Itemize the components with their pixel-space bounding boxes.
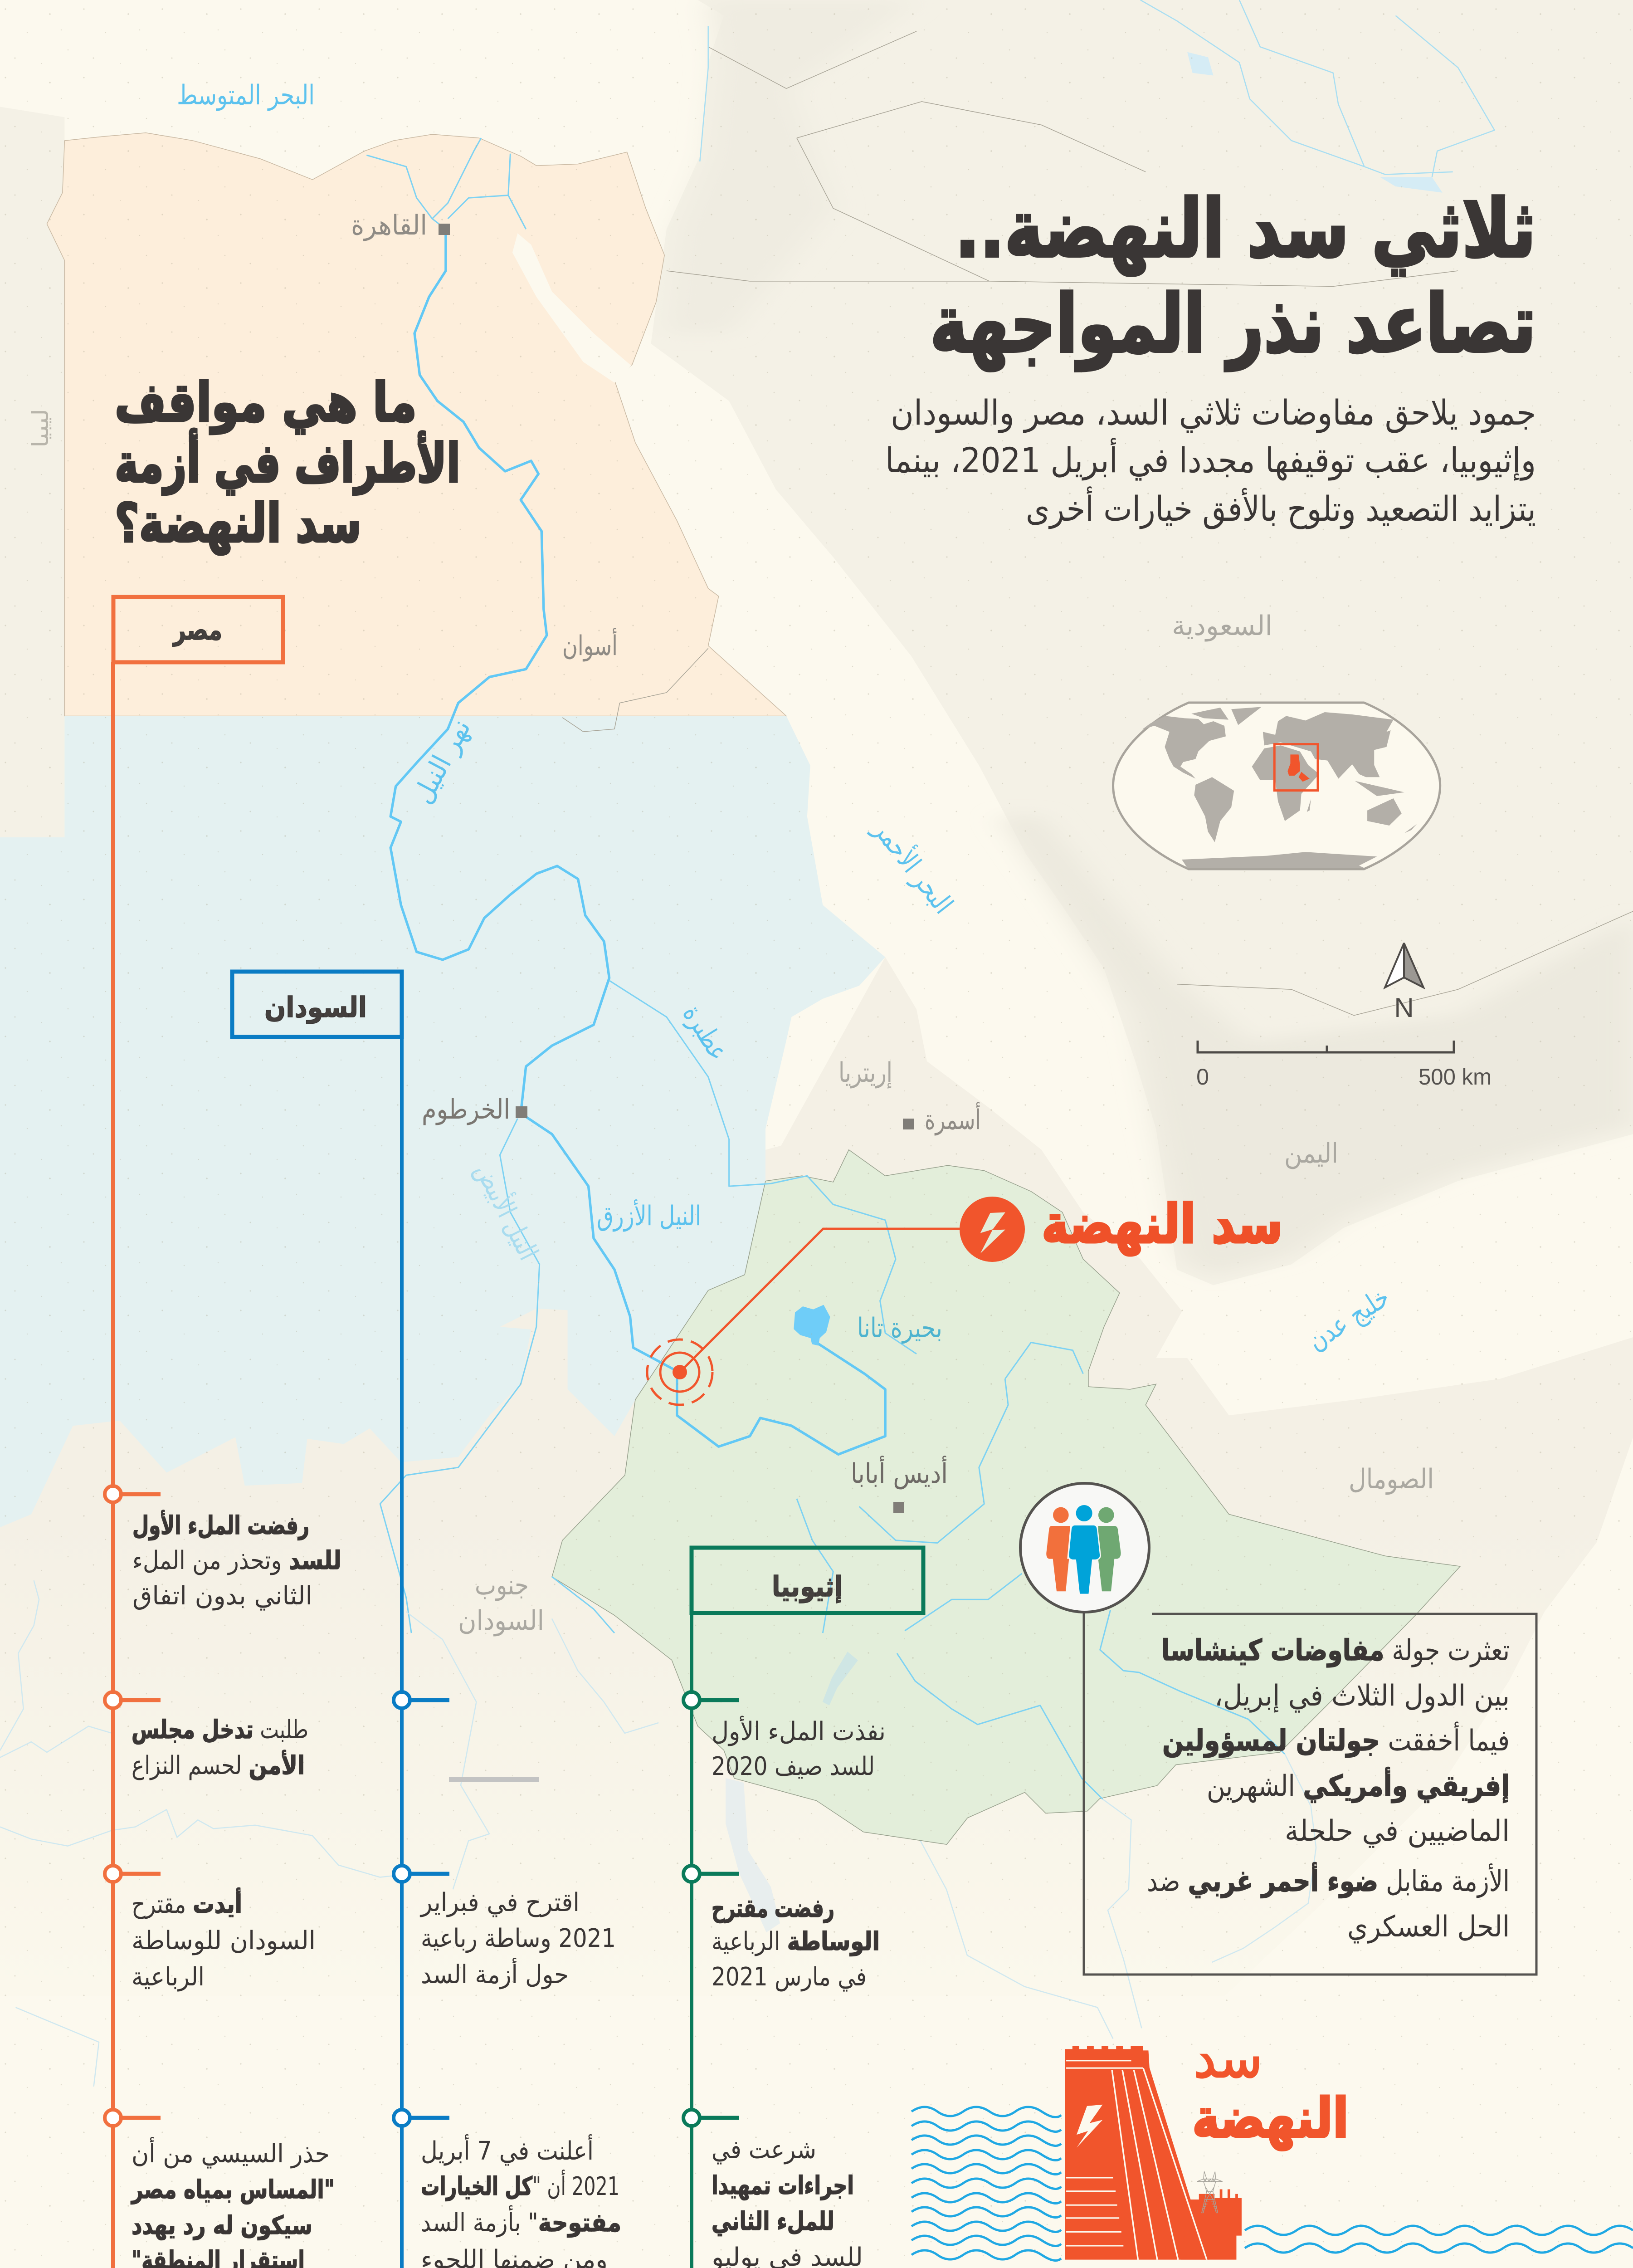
compass [1385, 943, 1423, 1023]
rivers: Euphrates and Tigris [700, 0, 1495, 177]
Ethiopia label: إثيوبيا [772, 1570, 843, 1603]
Egypt text 4 [131, 2137, 335, 2268]
world locator map [1113, 703, 1440, 869]
marker: Asmara [903, 1119, 914, 1129]
Ethiopia text 3: للملء الثاني [712, 2207, 834, 2236]
waves: downstream [1245, 2226, 1633, 2253]
rivers: Nile delta [366, 138, 526, 229]
label: Libya: ليبيا [27, 409, 54, 448]
Egypt text 3: السودان للوساطة [132, 1926, 316, 1955]
lake: Shatt marsh [1380, 177, 1443, 193]
Egypt text 1 [132, 1510, 341, 1611]
Sudan text 1: حول أزمة السد [421, 1958, 569, 1989]
scale 500 km: 500 km [1419, 1064, 1492, 1090]
highlighted countries [1287, 754, 1310, 782]
compass needle shade [1404, 943, 1423, 987]
leader line [680, 1229, 960, 1372]
dam body [1065, 2046, 1242, 2260]
Ethiopia text 2: رفضت مقترح [712, 1894, 834, 1923]
callout text [1147, 1634, 1510, 1944]
scale 0: 0 [1196, 1064, 1209, 1090]
Gulf of Suez [512, 233, 631, 383]
map labels [27, 79, 1434, 1637]
icon: people [1020, 1483, 1149, 1612]
Egypt label: مصر [172, 613, 222, 646]
pale rivers in South Sudan [0, 1580, 658, 2087]
timeline: Sudan [232, 972, 621, 2268]
scale bar [1196, 1041, 1492, 1090]
Sudan text 2 [421, 2134, 621, 2268]
marker: Addis Ababa [893, 1502, 904, 1513]
label: South Sudan: جنوب [475, 1569, 529, 1601]
dam callout: locator [647, 1193, 1283, 1405]
section heading: سد النهضة؟ [115, 492, 361, 555]
intro paragraph: جمود يلاحق مفاوضات ثلاثي السد، مصر والسودان [891, 392, 1536, 433]
scale line [1198, 1041, 1454, 1052]
Egypt text 1: الثاني بدون اتفاق [132, 1581, 312, 1611]
dam title: سد [1194, 2027, 1263, 2090]
callout text: إفريقي وأمريكي الشهرين [1207, 1767, 1510, 1803]
label: Eritrea: إريتريا [838, 1057, 892, 1089]
Sudan label box [232, 972, 402, 1037]
dam illustration [912, 2027, 1633, 2261]
Egypt nodes [105, 1486, 161, 2268]
dam marker dot [673, 1365, 687, 1379]
Sudan text 1: اقترح في فبراير [419, 1888, 580, 1917]
person orange [1046, 1507, 1070, 1591]
dam white lines [1066, 2061, 1207, 2260]
Ethiopia text 1: نفذت الملء الأول [712, 1716, 886, 1746]
label: Somalia: الصومال [1349, 1463, 1434, 1495]
section heading: الأطراف في أزمة [115, 428, 460, 495]
Egypt text 2 [132, 1715, 308, 1780]
icon: dam lightning [1077, 2105, 1102, 2148]
Ethiopia text 3 [710, 2135, 863, 2268]
Egypt vertical line [111, 662, 115, 2268]
Sudan text 2: مفتوحة" بأزمة السد [421, 2205, 621, 2238]
river: Nile [390, 235, 609, 1113]
section heading [115, 371, 460, 555]
dam label: سد النهضة [1042, 1193, 1283, 1256]
dam marker dashed ring [647, 1339, 712, 1405]
Sudan label: السودان [264, 991, 367, 1024]
callout: negotiations [1020, 1483, 1536, 1975]
intro paragraph: وإثيوبيا، عقب توقيفها مجددا في أبريل 2021، بينما [885, 438, 1536, 481]
Egypt text 3: أيدت مقترح [132, 1887, 242, 1919]
Ethiopia label box [692, 1548, 923, 1613]
callout text: الأزمة مقابل ضوء أحمر غربي ضد [1147, 1862, 1510, 1898]
intro paragraph: يتزايد التصعيد وتلوح بالأفق خيارات أخرى [1026, 486, 1536, 529]
river: Atbara [609, 981, 916, 1354]
timeline: Egypt [105, 597, 341, 2268]
label: Lake Tana: بحيرة تانا [857, 1312, 942, 1344]
Egypt text 1: رفضت الملء الأول [132, 1510, 309, 1540]
Sudan text 1: 2021 وساطة رباعية [421, 1924, 616, 1953]
Egypt text 2: الأمن لحسم النزاع [132, 1750, 305, 1780]
powerhouse [1181, 2190, 1242, 2260]
land: Ethiopia [552, 1150, 1460, 1844]
callout text: فيما أخفقت جولتان لمسؤولين [1162, 1721, 1510, 1758]
Egypt text 2: طلبت تدخل مجلس [132, 1715, 308, 1745]
title [930, 182, 1536, 371]
Ethiopia text 3: شرعت في [712, 2135, 816, 2165]
person blue [1068, 1505, 1101, 1594]
land shade: Yemen and west Arabia [1000, 816, 1633, 1276]
label: South Sudan second line: السودان [458, 1605, 544, 1637]
land: Libya [0, 107, 64, 837]
Egypt text 3: الرباعية [132, 1962, 205, 1992]
marker: Khartoum [516, 1106, 527, 1118]
callout text: بين الدول الثلاث في إبريل، [1214, 1679, 1510, 1713]
callout frame [1084, 1613, 1536, 1975]
land: Arabia [651, 0, 1633, 1285]
label: White Nile: النيل الأبيض [468, 1158, 545, 1265]
label: Aswan: أسوان [562, 628, 618, 662]
compass N: N [1394, 992, 1414, 1023]
small pylon on powerhouse [1197, 2171, 1223, 2213]
dam title: النهضة [1192, 2087, 1349, 2150]
divider mark [449, 1777, 539, 1782]
continents [1142, 707, 1417, 868]
land: Sudan [0, 716, 885, 1527]
label: Blue Nile: النيل الأزرق [597, 1199, 701, 1232]
rivers in southern Ethiopia and Somalia [823, 1574, 1316, 2038]
Egypt text 4: "المساس بمياه مصر [131, 2175, 335, 2204]
label: Gulf of Aden: خليج عدن [1302, 1281, 1395, 1357]
callout text: الماضيين في حلحلة [1285, 1814, 1510, 1848]
label: Khartoum: الخرطوم [422, 1094, 510, 1125]
label: Red Sea: البحر الأحمر [867, 813, 960, 920]
Egypt label box [113, 597, 283, 662]
Lake Turkana [726, 1778, 780, 1932]
Egypt text 4: حذر السيسي من أن [132, 2137, 330, 2169]
Ethiopia text 3: اجراءات تمهيدا [712, 2171, 854, 2200]
Ethiopia nodes [683, 1692, 739, 2268]
label: Asmara: أسمرة [925, 1102, 981, 1136]
river: White Nile [380, 1119, 540, 1633]
label: Mediterranean: البحر المتوسط [177, 79, 315, 111]
Egypt text 1: للسد وتحذر من الملء [132, 1546, 341, 1575]
timeline: Ethiopia [683, 1548, 923, 2268]
label: Cairo: القاهرة [351, 210, 427, 241]
intro paragraph [885, 392, 1536, 529]
land: Eritrea, South Sudan, Kenya and Somalia [0, 957, 1633, 1996]
label: Yemen: اليمن [1284, 1138, 1338, 1169]
marker: Cairo [439, 224, 450, 235]
Ethiopia text 2: في مارس 2021 [712, 1962, 867, 1992]
lake: Razzaza [1187, 52, 1214, 75]
river: Blue Nile [521, 1113, 885, 1454]
lake: Tana [794, 1305, 830, 1346]
Sudan nodes [394, 1692, 449, 2268]
Egypt text 4: سيكون له رد يهدد [132, 2211, 312, 2240]
callout text: الحل العسكري [1347, 1910, 1510, 1944]
callout text: تعثرت جولة مفاوضات كينشاسا [1161, 1634, 1510, 1667]
river: Awash and others [552, 1343, 1083, 1633]
compass needle [1385, 943, 1404, 987]
Egypt text 3 [132, 1887, 316, 1992]
section heading: ما هي مواقف [115, 371, 417, 434]
borders [562, 31, 1633, 1016]
Ethiopia text 1: للسد صيف 2020 [712, 1752, 875, 1781]
Ethiopia text 2: الوساطة الرباعية [712, 1927, 880, 1956]
Sudan text 1 [419, 1888, 616, 1989]
label: Addis Ababa: أديس أبابا [851, 1456, 948, 1490]
waves: reservoir [912, 2107, 1061, 2261]
Ethiopia text 2 [712, 1894, 880, 1992]
label: Saudi Arabia: السعودية [1172, 610, 1272, 642]
dam title [1192, 2027, 1349, 2150]
Ethiopia text 1 [712, 1716, 886, 1781]
land: Egypt [47, 133, 786, 716]
dam marker ring [660, 1353, 699, 1392]
people circle [1020, 1483, 1149, 1612]
person green [1098, 1507, 1121, 1591]
locator box [1274, 744, 1318, 791]
label: River Nile: نهر النيل [406, 714, 477, 809]
Sudan text 2: أعلنت في 7 أبريل [421, 2134, 594, 2166]
globe frame [1113, 703, 1440, 869]
Sudan text 2: 2021 أن "كل الخيارات [421, 2170, 619, 2201]
Ethiopia vertical line [690, 1613, 693, 2268]
dam badge [960, 1197, 1025, 1262]
label: Atbara: عطبرة [677, 999, 735, 1066]
icon: lightning badge [980, 1212, 1005, 1253]
Sudan vertical line [400, 1037, 404, 2268]
land shade: Sinai-Levant strip [667, 0, 916, 333]
